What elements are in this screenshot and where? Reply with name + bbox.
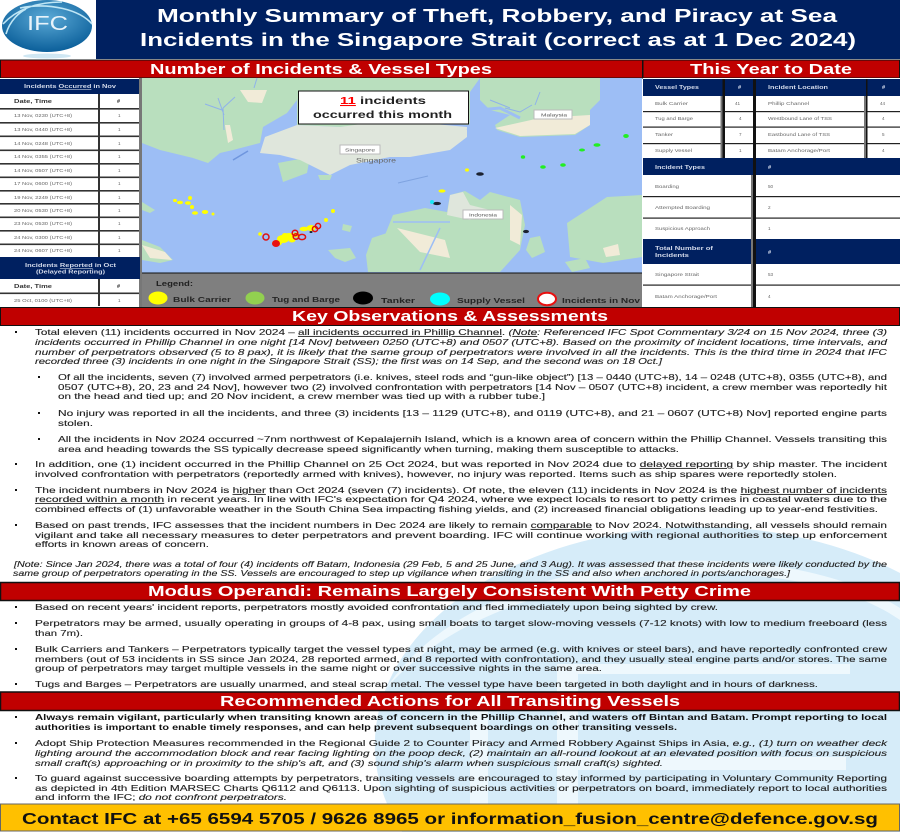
table: vessel types and incident location: Tanker xyxy=(655,132,674,137)
legend item: incidents in November xyxy=(538,293,641,305)
text block: key observations xyxy=(13,328,888,578)
text block: key observations: Total eleven (11) incidents occurred in Nov 2024 – all incidents occurred in Phillip Channel . (Note : Referenced IFC Spot Commentary 3/24 on 15 Nov 2024, three (3) xyxy=(35,328,887,337)
text block: key observations: No injury was reported in all the incidents, and three (3) incidents [13 – 1129 (UTC+8), and 0119 (UTC+8), and 21 – 0607 (UTC+8) Nov] reported engine parts xyxy=(58,409,887,418)
background watermark: IFC globe xyxy=(375,527,900,832)
table: vessel types and incident location: 4 xyxy=(739,116,742,121)
table: vessel types and incident location: # xyxy=(882,85,886,91)
map urban and sand areas xyxy=(142,90,620,260)
table: total number of incidents: Singapore Strait xyxy=(655,272,700,277)
panel: incidents occurred table: 17 Nov, 0600 (UTC+8) xyxy=(14,181,73,186)
panel: incidents occurred table: 23 Nov, 0530 (UTC+8) xyxy=(14,221,73,226)
text block: key observations: stolen. xyxy=(58,419,93,428)
title xyxy=(140,6,856,50)
table: vessel types and incident location: 7 xyxy=(739,132,742,137)
panel: incidents occurred table: Date, Time xyxy=(14,284,52,290)
panel: incidents occurred table: 24 Nov, 0300 (UTC+8) xyxy=(14,235,73,240)
heading: This Year to Date xyxy=(643,60,900,78)
table: vessel types and incident location: 1 xyxy=(739,148,742,153)
callout: 11 incidents xyxy=(298,91,468,124)
legend item: supply vessel: Supply Vessel xyxy=(457,296,525,305)
text block: recommended actions: as depicted in 4th Edition MARSEC Charts Q6112 and Q6113. Upon sighting of suspicious activities or perpetrators on board, immediately report to local authorities xyxy=(35,784,887,793)
table: vessel types and incident location xyxy=(643,79,900,158)
legend xyxy=(142,272,642,307)
text block: key observations: vigilant and take all necessary measures to deter perpetrators and prevent boarding. IFC will continue working with regional authorities to step up enforcement xyxy=(35,531,888,540)
text block: key observations: 0507 (UTC+8), 20, 23 and 24 Nov], however two (2) involved confrontation with perpetrators [14 Nov – 0507 (UTC+8) incident, a crew member was reportedly hit xyxy=(58,383,888,392)
logo: IFC globe xyxy=(0,0,96,59)
panel: incidents occurred table: 1 xyxy=(118,298,121,303)
text block: modus operandi: Based on recent years' incident reports, perpetrators mostly avoided confrontation and fled immediately upon being sighted by crew. xyxy=(35,603,718,612)
panel: incidents occurred table: 20 Nov, 0530 (UTC+8) xyxy=(14,208,73,213)
map labels: Malaysia xyxy=(541,112,568,118)
table: vessel types and incident location: 41 xyxy=(735,101,741,106)
legend item: supply vessel xyxy=(430,292,525,306)
table: total number of incidents: Batam Anchorage/Port xyxy=(655,294,718,299)
table: total number of incidents: Total Number of xyxy=(655,246,713,252)
red rings: incidents in November xyxy=(263,223,321,240)
panel: incidents occurred table: (Delayed Reporting) xyxy=(36,270,105,276)
heading: Number of Incidents and Vessel Types xyxy=(0,60,642,78)
panel: incidents occurred table: 25 Oct, 0100 (UTC+8) xyxy=(14,298,73,303)
callout: 11 incidents: 11 incidents xyxy=(340,95,426,107)
panel: incidents occurred table: # xyxy=(117,99,120,105)
heading: Key Observations and Assessments xyxy=(0,308,900,326)
table: vessel types and incident location: Westbound Lane of TSS xyxy=(768,116,832,121)
map labels: Singapore xyxy=(345,148,376,152)
title: Monthly Summary of Theft, Robbery, and Piracy at Sea xyxy=(157,6,838,26)
panel: incidents occurred table: 1 xyxy=(118,208,121,213)
text block: recommended actions: Adopt Ship Protection Measures recommended in the Regional Guide 2 to Counter Piracy and Armed Robbery Against Ships in Asia, e.g., (1) turn on weather deck xyxy=(35,739,888,748)
text block: key observations: efforts in known areas of concern. xyxy=(35,540,209,549)
text block: key observations: The incident numbers in Nov 2024 is higher than Oct 2024 (seven (7) incidents). Of note, the eleven (11) incidents in Nov 2024 is the highest number of incidents xyxy=(35,486,887,495)
text block: key observations: recorded within a month in recent years. In line with IFC's expectation for Q4 2024, where we expect locals to resort to petty crimes in coastal waters due to the xyxy=(35,495,888,504)
text block: key observations: Based on past trends, IFC assesses that the incident numbers in Dec 2024 are likely to remain comparable to Nov 2024. Notwithstanding, all vessels should remain xyxy=(35,521,888,530)
table: vessel types and incident location: Bulk Carrier xyxy=(655,101,689,106)
panel: year to date tables xyxy=(643,78,900,307)
panel: incidents occurred table: 1 xyxy=(118,168,121,173)
callout: 11 incidents: occurred this month xyxy=(313,109,452,121)
text block: key observations: number of perpetrators observed (5 to 8 pax), it is likely that the same group of perpetrators were involved in all the incidents. This is the third time in 2024 that IFC xyxy=(35,348,887,357)
legend item: tanker xyxy=(353,292,415,305)
map labels xyxy=(340,110,572,219)
title: Incidents in the Singapore Strait (correct as at 1 Dec 2024) xyxy=(140,30,856,50)
text block: key observations: incidents occurred in Phillip Channel in one night [14 Nov] between 0250 (UTC+8) and 0507 (UTC+8). Based on the proximity of incident locations, time intervals, and xyxy=(35,338,888,347)
panel: map xyxy=(142,78,642,273)
heading: Recommended Actions xyxy=(0,692,900,710)
text block: recommended actions: lighting around the accommodation block and rear facing lighting on the poop deck, (2) maintain an all-round lookout at an elevated position with focus on suspicious xyxy=(35,749,887,758)
table: incident types: # xyxy=(768,165,772,171)
panel: incidents occurred table: 1 xyxy=(118,141,121,146)
text block: key observations: All the incidents in Nov 2024 occurred ~7nm northwest of Kepalajernih Island, which is a known area of concern within the Phillip Channel. Vessels transiting this xyxy=(58,435,887,444)
text block: key observations: Of all the incidents, seven (7) involved armed perpetrators (i.e. knives, steel rods and “gun-like object”) [13 – 0440 (UTC+8), 14 – 0248 (UTC+8), 0355 (UTC+8), and xyxy=(58,373,888,382)
table: vessel types and incident location: Phillip Channel xyxy=(768,101,809,106)
table: vessel types and incident location: 4 xyxy=(882,148,885,153)
panel: incidents occurred table: 24 Nov, 0607 (UTC+8) xyxy=(14,248,73,253)
table: vessel types and incident location: 44 xyxy=(880,101,886,106)
table: incident types: 2 xyxy=(768,205,771,210)
text block: modus operandi: Tugs and Barges – Perpetrators are usually unarmed, and steal scrap metal. The vessel type have been targeted in both daylight and in hours of darkness. xyxy=(35,680,818,689)
text block: key observations: recorded three (3) incidents in one night in the Singapore Strait (SS); the first was on 14 Sep, and the second was on 18 Oct.] xyxy=(35,357,663,366)
panel: incidents occurred table xyxy=(0,78,142,307)
text block: recommended actions: and inform the IFC; do not confront perpetrators. xyxy=(35,793,287,802)
table: incident types: 50 xyxy=(768,184,774,189)
panel: incidents occurred table: 14 Nov, 0355 (UTC+8) xyxy=(14,154,73,159)
table: vessel types and incident location: Eastbound Lane of TSS xyxy=(768,132,830,137)
panel: incidents occurred table: Incidents Occurred in Nov xyxy=(24,84,117,90)
panel: incidents occurred table: 1 xyxy=(118,113,121,118)
table: total number of incidents: 53 xyxy=(768,272,774,277)
table: vessel types and incident location: Supply Vessel xyxy=(655,148,692,153)
heading: Recommended Actions: Recommended Actions for All Transiting Vessels xyxy=(220,694,680,710)
text block: key observations: [Note: Since Jan 2024, there was a total of four (4) incidents off Batam, Indonesia (29 Feb, 5 and 25 June, and 3 Aug). It was assessed that these incidents were likely conducted by the xyxy=(13,560,888,569)
text block: key observations: In addition, one (1) incident occurred in the Phillip Channel on 25 Oct 2024, but was reported in Nov 2024 due to delayed reporting by ship master. The incident xyxy=(35,460,888,469)
yellow markers: bulk carrier xyxy=(173,168,469,246)
table: vessel types and incident location: Vessel Types xyxy=(655,85,699,91)
table: total number of incidents: Incidents xyxy=(655,253,689,259)
heading: Number of Incidents and Vessel Types: Number of Incidents & Vessel Types xyxy=(150,62,492,78)
table: incident types xyxy=(643,158,900,231)
legend: Legend: xyxy=(156,279,193,288)
panel: incidents occurred table: 13 Nov, 0440 (UTC+8) xyxy=(14,127,73,132)
table: vessel types and incident location: Tug and Barge xyxy=(655,116,694,121)
table: vessel types and incident location: Incident Location xyxy=(768,85,829,91)
panel: incidents occurred table: # xyxy=(117,284,120,290)
text block: recommended actions: small craft(s) approaching or in proximity to the ship's aft, and (3) sound ship's alarm when suspicious small craft(s) sighted. xyxy=(35,759,663,768)
text block: recommended actions xyxy=(15,713,888,802)
table: total number of incidents: 4 xyxy=(768,294,771,299)
text block: recommended actions: To guard against successive boarding attempts by perpetrators, transiting vessels are encouraged to stay informed by participating in Voluntary Community Reporting xyxy=(35,774,888,783)
map land masses xyxy=(142,78,642,272)
table: vessel types and incident location: # xyxy=(738,85,742,91)
table: incident types: Incident Types xyxy=(655,165,705,171)
table: incident types: 1 xyxy=(768,226,771,231)
logo: IFC globe: IFC xyxy=(27,13,68,35)
legend item: tug and barge xyxy=(246,292,340,304)
contact bar xyxy=(0,804,900,831)
legend item: tug and barge: Tug and Barge xyxy=(272,295,340,304)
text block: recommended actions: authorities is important to enable timely responses, and can help prevent subsequent boardings on other transiting vessels. xyxy=(35,723,677,732)
panel: incidents occurred table: 1 xyxy=(118,154,121,159)
panel: incidents occurred table: 1 xyxy=(118,235,121,240)
text block: modus operandi: Perpetrators may be armed, usually operating in groups of 4-8 pax, using small boats to target slow-moving vessels (7-12 knots) with low to medium freeboard (less xyxy=(35,619,887,628)
map rivers and channels xyxy=(205,78,540,270)
header band xyxy=(0,0,900,59)
text block: key observations: involved confrontation with perpetrators (reportedly armed with knives), however, no injury was reported. Items such as ship spares were reportedly stolen. xyxy=(35,470,837,479)
text block: modus operandi xyxy=(15,603,888,689)
legend item: incidents in November: Incidents in Nov xyxy=(562,296,641,305)
legend item: tanker: Tanker xyxy=(381,296,415,305)
heading: Modus Operandi xyxy=(0,582,900,600)
panel: incidents occurred table: 1 xyxy=(118,221,121,226)
text block: key observations: on the head and tied up; and 20 Nov incident, a crew member was tied up with a rubber tube.] xyxy=(58,392,545,401)
legend item: bulk carrier: Bulk Carrier xyxy=(173,295,231,304)
panel: incidents occurred table: 1 xyxy=(118,195,121,200)
text block: key observations: same group of perpetrators operating in the SS. Vessels are encouraged to step up vigilance when transiting in the SS and also when anchored in ports/anchorages.] xyxy=(13,569,791,578)
panel: incidents occurred table: 14 Nov, 0248 (UTC+8) xyxy=(14,141,73,146)
text block: modus operandi: members (out of 53 incidents in SS since Jan 2024, 28 reported armed, and 8 reported with confrontation), and they usually steal engine parts and/or stores. The same xyxy=(35,655,888,664)
table: incident types: Suspicious Approach xyxy=(655,226,711,231)
table: total number of incidents xyxy=(643,239,900,299)
text block: modus operandi: Bulk Carriers and Tankers – Perpetrators typically target the vessel types at night, may be armed (e.g. with knives or steel bars), and have reportedly confronted crew xyxy=(35,645,887,654)
panel: incidents occurred table: 1 xyxy=(118,181,121,186)
panel: incidents occurred table: Date, Time xyxy=(14,99,52,105)
panel: incidents occurred table: 19 Nov, 2249 (UTC+8) xyxy=(14,195,73,200)
text block: key observations: combined effects of (1) unfavorable weather in the South China Sea impacting fishing yields, and (2) increased financial obligations leading up to year-end festivities. xyxy=(35,505,878,514)
map labels: Singapore xyxy=(356,158,397,164)
panel: incidents occurred table: 14 Nov, 0507 (UTC+8) xyxy=(14,168,73,173)
table: total number of incidents: # xyxy=(768,250,772,256)
black markers: tanker xyxy=(310,172,529,233)
panel: incidents occurred table: Incidents Reported in Oct xyxy=(25,263,116,269)
panel: incidents occurred table: 13 Nov, 0230 (UTC+8) xyxy=(14,113,73,118)
contact bar: Contact IFC at +65 6594 5705 / 9626 8965 or information_fusion_centre@defence.gov.sg xyxy=(22,811,878,828)
table: incident types: Boarding xyxy=(655,184,680,189)
map labels: Indonesia xyxy=(469,212,498,218)
legend item: bulk carrier xyxy=(148,292,231,304)
heading: Modus Operandi: Modus Operandi: Remains Largely Consistent With Petty Crime xyxy=(148,584,751,600)
green markers: tug and barge xyxy=(521,134,629,169)
panel: incidents occurred table: 1 xyxy=(118,248,121,253)
panel: incidents occurred table: 1 xyxy=(118,127,121,132)
heading: Key Observations and Assessments: Key Observations & Assessments xyxy=(292,309,608,325)
table: vessel types and incident location: 4 xyxy=(882,116,885,121)
text block: key observations: area and heading towards the SS typically decrease speed significantly when turning, making them susceptible to attacks. xyxy=(58,445,679,454)
cyan marker: supply vessel xyxy=(430,200,434,204)
text block: modus operandi: group of perpetrators may target multiple vessels in the same night or over successive nights in the same area. xyxy=(35,664,602,673)
heading: This Year to Date: This Year to Date xyxy=(690,62,852,78)
table: incident types: Attempted Boarding xyxy=(655,205,711,210)
text block: recommended actions: Always remain vigilant, particularly when transiting known areas of concern in the Phillip Channel, and waters off Bintan and Batam. Prompt reporting to local xyxy=(35,713,887,722)
table: vessel types and incident location: 5 xyxy=(882,132,885,137)
table: vessel types and incident location: Batam Anchorage/Port xyxy=(768,148,831,153)
text block: modus operandi: than 7m). xyxy=(35,629,83,638)
